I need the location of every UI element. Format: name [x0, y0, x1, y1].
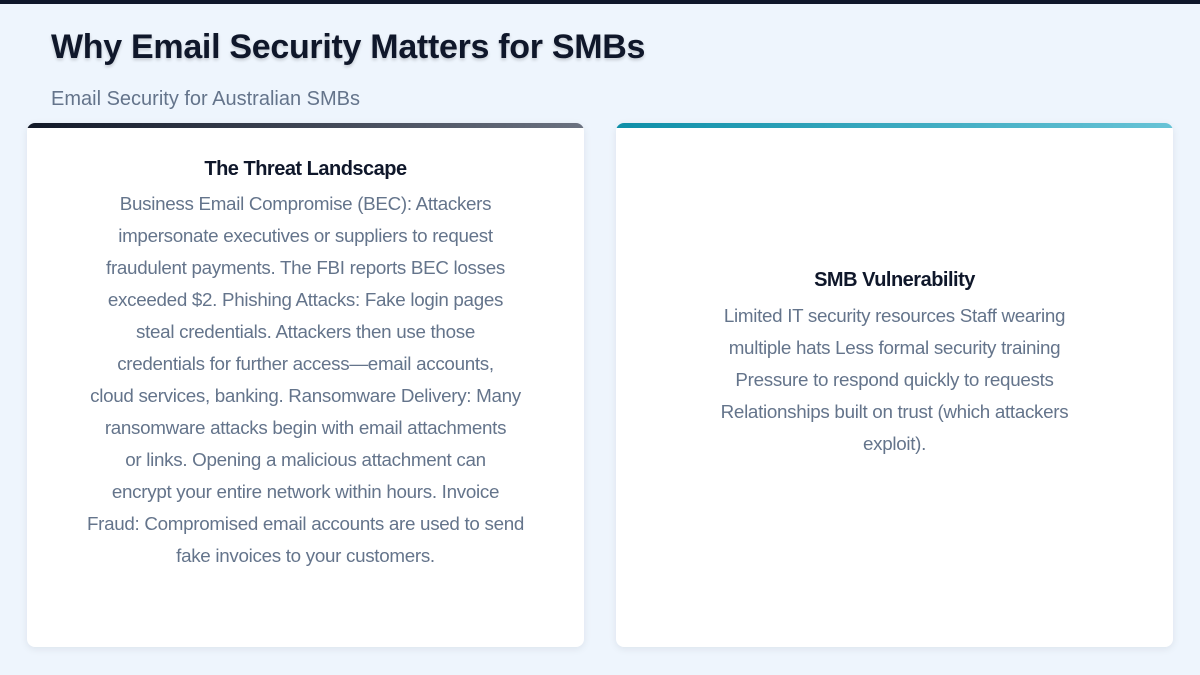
text: SMB vulnerability body: multiple hats Less formal security training — [729, 337, 1060, 358]
text: SMB vulnerability body — [721, 305, 1068, 454]
text: threat landscape body: steal credentials. Attackers then use those — [136, 321, 475, 342]
panel: SMB vulnerability — [616, 123, 1173, 647]
heading: threat landscape: The Threat Landscape — [204, 158, 407, 180]
title: Why Email Security Matters for SMBs — [51, 28, 645, 66]
text: threat landscape body — [87, 193, 524, 566]
text: threat landscape body: Business Email Compromise (BEC): Attackers — [120, 193, 491, 214]
text: SMB vulnerability body: Limited IT security resources Staff wearing — [724, 305, 1065, 326]
text: threat landscape body: exceeded $2. Phishing Attacks: Fake login pages — [108, 289, 503, 310]
text: threat landscape body: Fraud: Compromised email accounts are used to send — [87, 513, 524, 534]
text: SMB vulnerability body: Pressure to respond quickly to requests — [735, 369, 1054, 390]
text: threat landscape body: credentials for further access—email accounts, — [117, 353, 494, 374]
text: threat landscape body: or links. Opening a malicious attachment can — [125, 449, 486, 470]
text: threat landscape body: ransomware attacks begin with email attachments — [105, 417, 506, 438]
panel: threat landscape — [27, 123, 584, 647]
subtitle: Email Security for Australian SMBs — [51, 88, 360, 110]
heading: SMB vulnerability: SMB Vulnerability — [814, 269, 975, 291]
text: threat landscape body: encrypt your entire network within hours. Invoice — [112, 481, 499, 502]
text: threat landscape body: cloud services, banking. Ransomware Delivery: Many — [90, 385, 521, 406]
text: threat landscape body: fake invoices to your customers. — [176, 545, 435, 566]
text: SMB vulnerability body: exploit). — [863, 433, 926, 454]
text: threat landscape body: impersonate executives or suppliers to request — [118, 225, 493, 246]
text: threat landscape body: fraudulent payments. The FBI reports BEC losses — [106, 257, 505, 278]
text: SMB vulnerability body: Relationships built on trust (which attackers — [721, 401, 1068, 422]
